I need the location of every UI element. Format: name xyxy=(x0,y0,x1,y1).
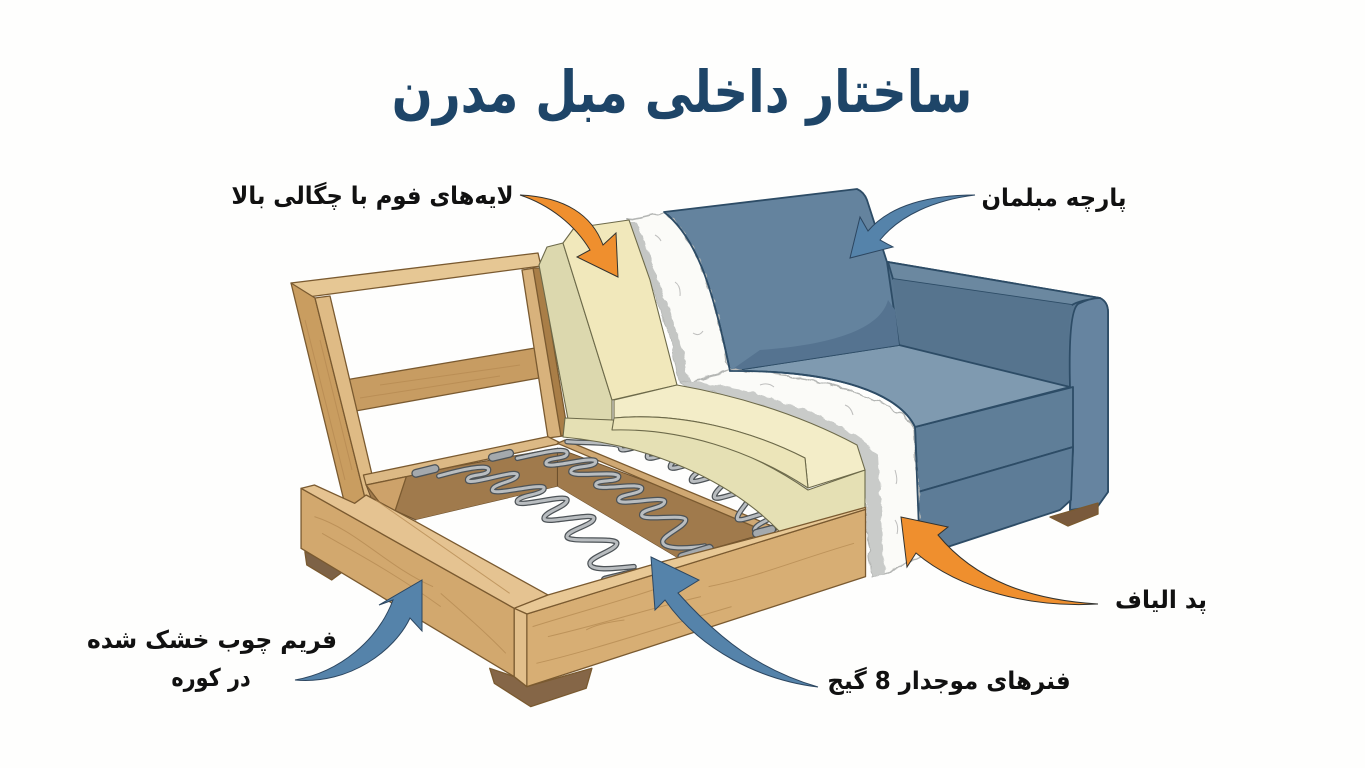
arrow: springs xyxy=(651,557,818,687)
seat cushions xyxy=(730,345,1073,556)
title: ساختار داخلی مبل مدرن xyxy=(392,58,972,126)
label: high density foam: لایه‌های فوم با چگالی بالا xyxy=(231,181,514,210)
wave springs xyxy=(416,442,774,580)
foot: sofa right xyxy=(1050,503,1098,526)
base frame front xyxy=(301,485,866,707)
left rail xyxy=(301,488,514,677)
arrow: fabric xyxy=(850,195,975,258)
back frame xyxy=(291,253,568,505)
arrow: fiber xyxy=(901,517,1098,605)
label: kiln dried wood frame xyxy=(87,625,337,692)
base frame interior xyxy=(363,437,778,595)
fiber pad xyxy=(629,212,921,578)
foam layers xyxy=(539,220,865,532)
label: upholstery fabric: پارچه مبلمان xyxy=(981,183,1127,212)
back cushion xyxy=(664,189,899,371)
feet xyxy=(305,552,345,580)
label: wave springs: فنرهای موجدار 8 گیج xyxy=(827,666,1071,695)
arrow: foam xyxy=(520,195,618,277)
arrow: frame xyxy=(295,580,422,680)
label: fiber pad: پد الیاف xyxy=(1115,585,1207,614)
label: kiln dried wood frame: فریم چوب خشک شده xyxy=(87,625,337,654)
sofa arm xyxy=(888,262,1108,510)
illustration: sofa cutaway xyxy=(291,189,1108,707)
label: kiln dried wood frame: در کوره xyxy=(171,664,251,692)
